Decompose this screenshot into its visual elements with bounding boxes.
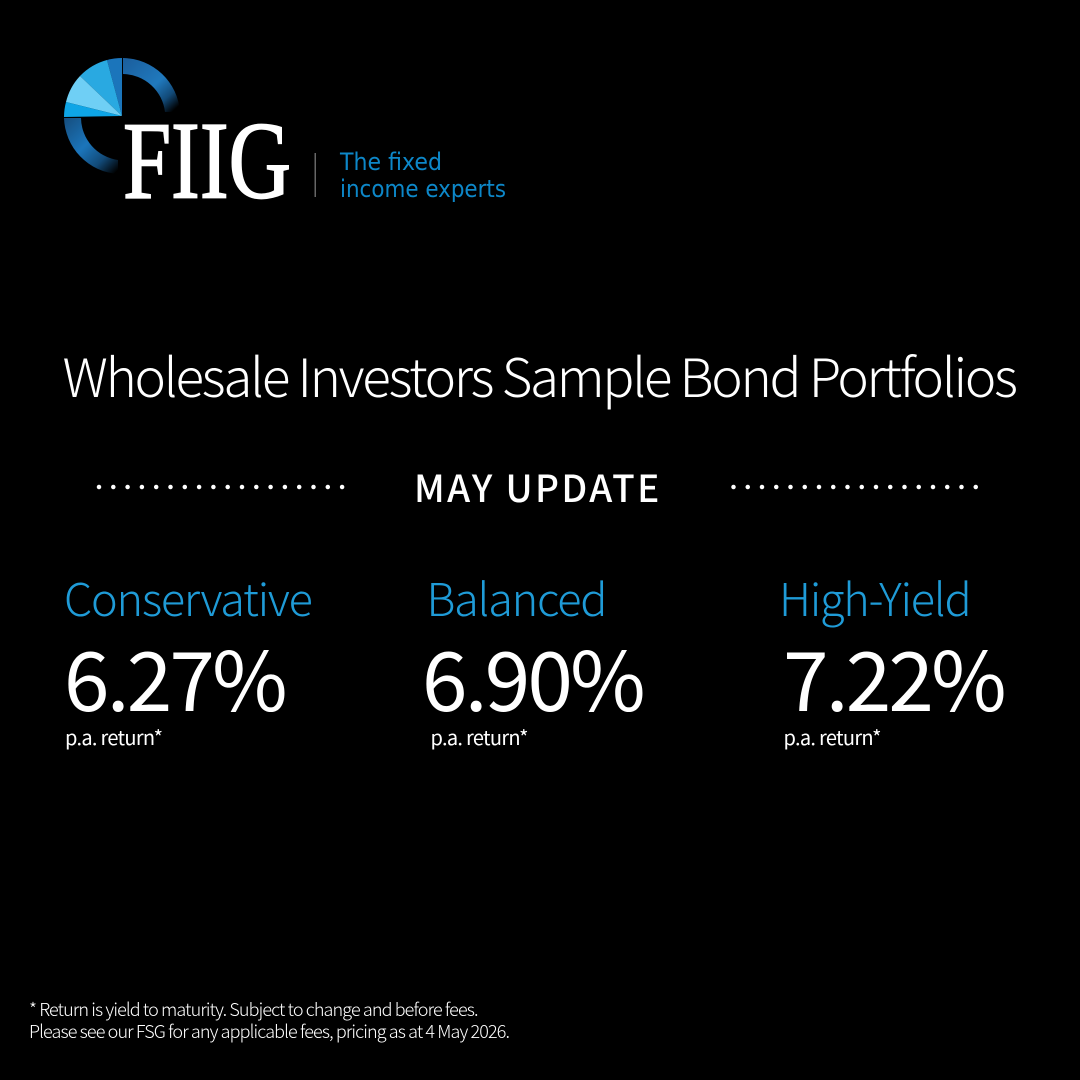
logo: FIIG — [64, 58, 506, 220]
portfolio: Balanced — [422, 564, 643, 751]
right dotted divider — [731, 484, 978, 490]
portfolio: High-Yield: High-Yield — [779, 564, 970, 629]
portfolio: Conservative: Conservative — [64, 564, 312, 629]
portfolio: Conservative: 6.27% — [64, 616, 285, 735]
portfolio: Balanced: Balanced — [426, 564, 606, 629]
footnote — [29, 996, 509, 1044]
logo: FIIG: The fixed — [339, 148, 442, 176]
portfolio: High-Yield: p.a. return* — [784, 722, 881, 751]
portfolio: Conservative — [64, 564, 312, 751]
portfolio: Conservative: p.a. return* — [65, 722, 162, 751]
portfolio: Balanced: 6.90% — [422, 616, 643, 735]
portfolio: High-Yield: 7.22% — [783, 616, 1004, 735]
logo: FIIG: income experts — [340, 175, 506, 203]
title: Wholesale Investors Sample Bond Portfolios — [62, 337, 1016, 413]
footnote: Please see our FSG for any applicable fees, pricing as at 4 May 2026. — [29, 1018, 509, 1044]
left dotted divider — [96, 484, 344, 490]
heading: May update: MAY UPDATE — [414, 459, 662, 513]
logo: FIIG: FIIG — [123, 100, 291, 220]
portfolio: Balanced: p.a. return* — [430, 722, 528, 751]
footnote: * Return is yield to maturity. Subject to change and before fees. — [29, 996, 478, 1022]
portfolio: High-Yield — [779, 564, 1004, 751]
